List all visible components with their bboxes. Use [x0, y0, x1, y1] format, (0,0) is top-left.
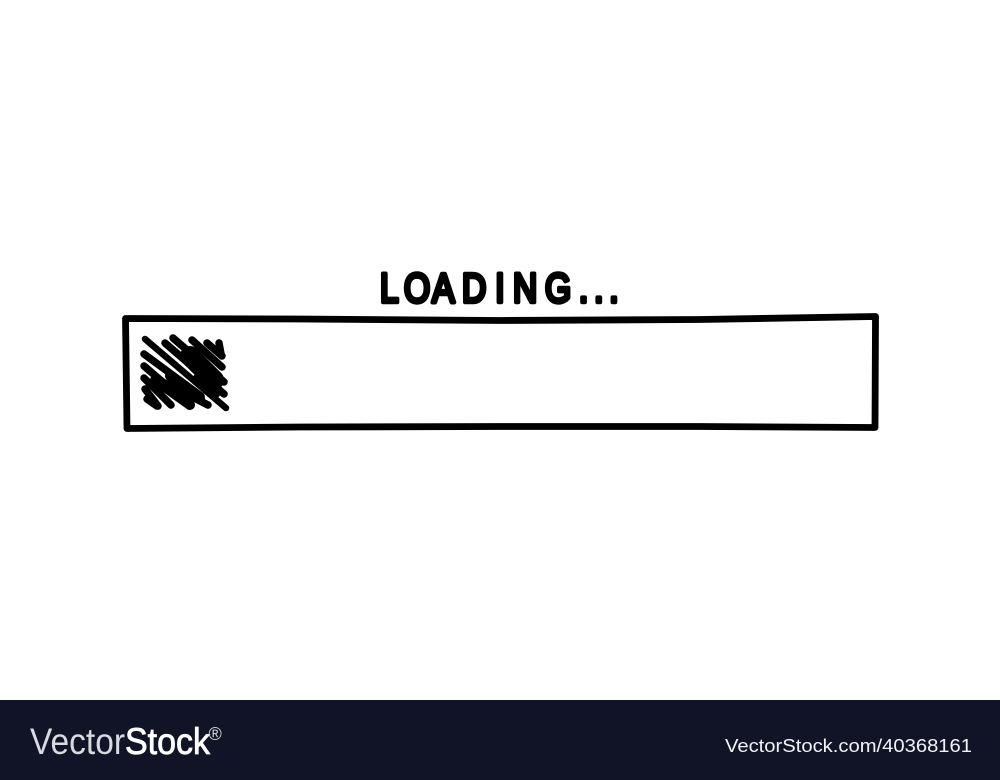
footer logo: VectorStock: Vector [30, 721, 125, 762]
progress bar outline [126, 316, 876, 428]
footer logo: VectorStock: ® [208, 724, 222, 744]
heading: loading: ... [579, 265, 619, 311]
footer image id: VectorStock.com/40368161 [725, 736, 972, 756]
heading: loading: LOADING [380, 265, 571, 311]
footer logo: VectorStock: Stock [125, 721, 210, 762]
footer band [0, 700, 1000, 780]
footer logo: VectorStock [30, 721, 222, 762]
progress fill: scribble [144, 338, 226, 408]
